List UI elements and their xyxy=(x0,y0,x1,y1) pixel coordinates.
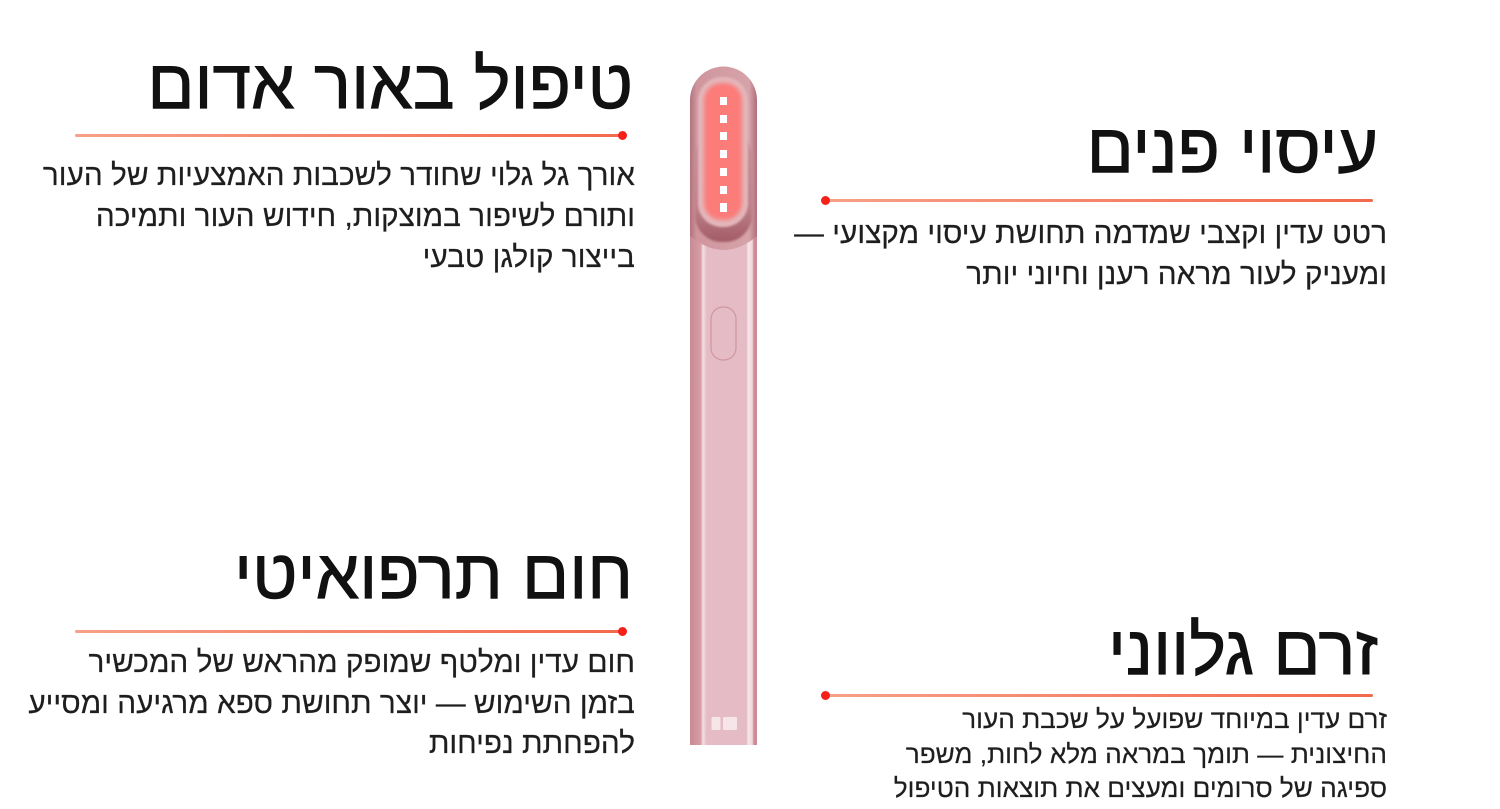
connector line xyxy=(75,630,625,633)
illustration: beauty wand device xyxy=(690,66,757,745)
wand handle xyxy=(690,232,757,745)
power button xyxy=(711,307,736,360)
panel: red light therapy xyxy=(43,45,635,274)
heading: red light therapy: טיפול באור אדום xyxy=(147,45,633,123)
heading: therapeutic warmth: חום תרפואיטי xyxy=(234,535,633,613)
description text: אורך גל גלוי שחודר לשכבות האמצעיות של העור xyxy=(43,159,635,192)
head recess xyxy=(695,130,752,242)
description text: רטט עדין וקצבי שמדמה תחושת עיסוי מקצועי — xyxy=(794,217,1387,250)
connector dot xyxy=(821,691,830,700)
connector dot xyxy=(618,627,627,636)
red light panel xyxy=(704,83,742,220)
heading: galvanic current: זרם גלווני xyxy=(1108,611,1378,689)
panel: facial massage xyxy=(794,109,1387,290)
logo mark xyxy=(712,717,737,730)
description text: להפחתת נפיחות xyxy=(429,727,635,760)
description text: ותורם לשיפור במוצקות, חידוש העור ותמיכה xyxy=(96,200,635,233)
panel: galvanic current xyxy=(821,611,1387,803)
description text: החיצונית — תומך במראה מלא לחות, משפר xyxy=(906,738,1387,768)
connector dot xyxy=(618,131,627,140)
description text: ספיגה של סרומים ומעצים את תוצאות הטיפול xyxy=(894,773,1387,803)
description text xyxy=(43,159,635,274)
description text: זרם עדין במיוחד שפועל על שכבת העור xyxy=(962,704,1387,734)
heading: facial massage: עיסוי פנים xyxy=(1087,109,1378,187)
description text xyxy=(28,646,635,760)
connector line xyxy=(825,694,1373,697)
panel: therapeutic warmth xyxy=(28,535,635,760)
description text xyxy=(794,217,1387,290)
description text: בייצור קולגן טבעי xyxy=(423,241,635,274)
connector dot xyxy=(821,196,830,205)
description text: בזמן השימוש — יוצר תחושת ספא מרגיעה ומסייע xyxy=(28,686,635,720)
description text: ומעניק לעור מראה רענן וחיוני יותר xyxy=(966,258,1387,290)
description text xyxy=(894,704,1387,803)
connector line xyxy=(75,134,625,137)
wand head xyxy=(690,67,757,250)
description text: חום עדין ומלטף שמופק מהראש של המכשיר xyxy=(88,646,635,679)
LED lights xyxy=(720,97,727,212)
connector line xyxy=(825,199,1373,202)
